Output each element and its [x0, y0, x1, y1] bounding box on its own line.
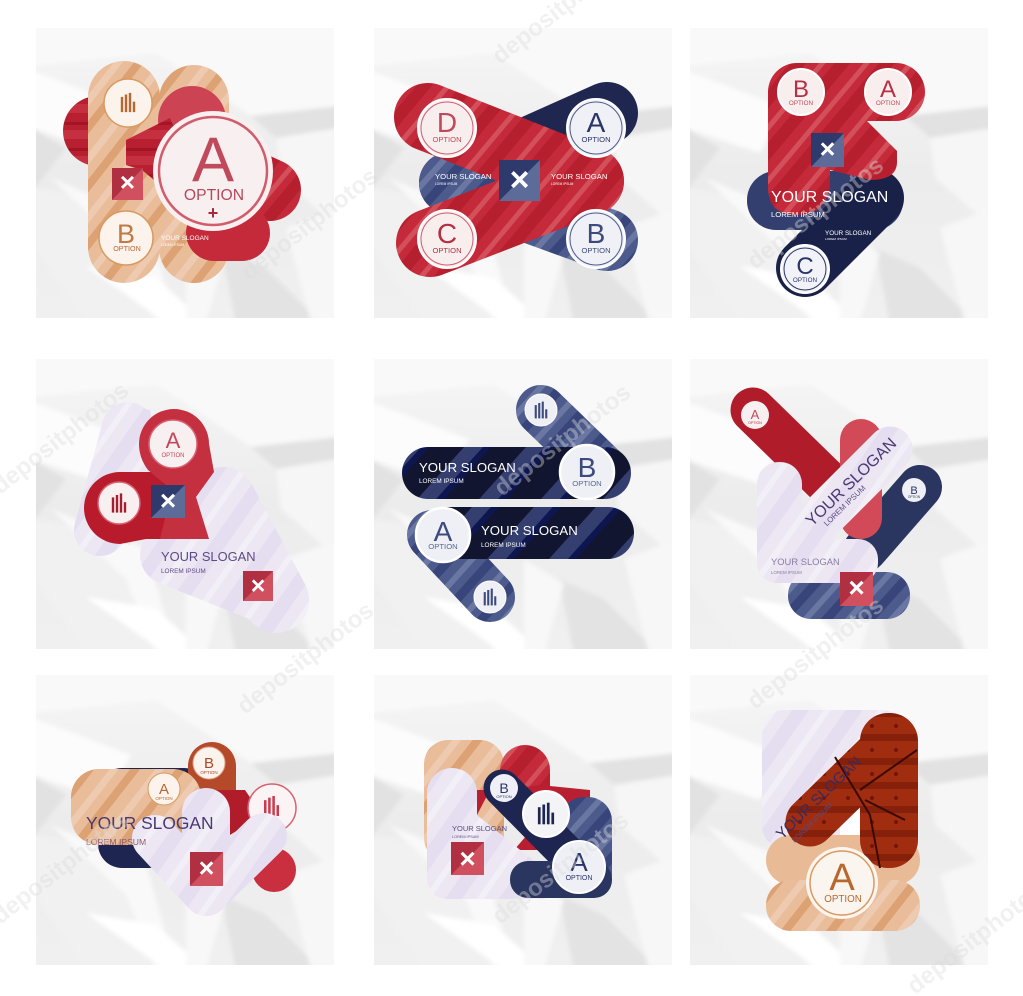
navy pill diagonal: [805, 198, 875, 268]
slogan small: YOUR SLOGAN: [771, 556, 840, 567]
circle: option C: OPTION: [793, 277, 818, 284]
circle: option B: [778, 69, 824, 115]
navy pill bottom: [788, 572, 910, 619]
slogan upper: YOUR SLOGAN: [419, 460, 516, 475]
brick pill vertical: [860, 713, 918, 868]
circle: option A: A: [166, 428, 181, 453]
circle: option A: [553, 841, 605, 893]
icon: close button red: [243, 571, 273, 601]
circle: option A: A: [192, 125, 234, 195]
slogan: [452, 824, 507, 839]
lavender pill right: [223, 500, 276, 600]
slogan text: YOUR SLOGAN: [161, 235, 209, 242]
circle: option B: [99, 211, 153, 265]
circle: option C: OPTION: [432, 246, 462, 255]
watermarks: depositphotos: [236, 163, 383, 286]
watermarks: depositphotos: [742, 152, 889, 275]
circle: option B: B: [793, 76, 809, 103]
circle: option A: OPTION: [161, 453, 185, 459]
slogan: LOREM IPSUM: [86, 837, 146, 847]
red pill vertical: [840, 440, 882, 518]
slogan small: LOREM IPSUM: [825, 237, 847, 241]
navy pill diagonal: [865, 487, 920, 550]
icon: bar chart badge top: [525, 394, 557, 426]
slogan small: [771, 556, 840, 575]
slogan lower: [481, 523, 578, 549]
circle: option C: [418, 210, 476, 268]
circle: option C: C: [796, 253, 814, 280]
slogan: [161, 549, 256, 575]
circle: option A: [741, 401, 769, 429]
slogan rotated: YOUR SLOGAN: [802, 434, 900, 530]
circle: option A: OPTION: [748, 421, 762, 425]
panel: mixed rounded cluster: [369, 670, 677, 970]
slogan left: [435, 172, 491, 186]
icon: close button: [112, 167, 143, 200]
tan pill: [424, 740, 504, 862]
lavender rounded panel: [762, 710, 904, 848]
circle: option B: [193, 747, 225, 779]
slogan upper: [419, 460, 516, 485]
slogan rotated: LOREM IPSUM: [790, 801, 834, 844]
slogan rotated: LOREM IPSUM: [822, 484, 868, 528]
icon: bar chart badge: [523, 791, 569, 837]
lavender pill diagonal: [817, 449, 890, 522]
icon: bar chart badge: [104, 79, 152, 127]
slogan right: YOUR SLOGAN: [551, 172, 607, 181]
circle: option A: [567, 99, 625, 157]
panel: diagonal check: [685, 354, 993, 654]
watermarks: depositphotos: [487, 807, 634, 930]
slogan large: [771, 189, 888, 219]
circle: option B: B: [578, 452, 596, 483]
circle: option B: OPTION: [113, 244, 141, 253]
red pill: [500, 745, 550, 820]
panel: red and navy slogan: [685, 23, 993, 323]
circle: option B: OPTION: [572, 479, 602, 488]
circle: option A: +: [208, 203, 218, 223]
watermarks: depositphotos: [742, 592, 889, 715]
red wedge: [210, 790, 262, 835]
circle: option B: B: [204, 755, 214, 772]
circle: option A: OPTION: [876, 100, 901, 107]
red pill vertical: [188, 742, 236, 837]
circle: option A: OPTION: [184, 187, 244, 204]
tan pill right: [159, 65, 229, 283]
circle: option A: A: [751, 407, 760, 422]
circle: option B: OPTION: [200, 770, 218, 775]
slogan left: YOUR SLOGAN: [435, 172, 491, 181]
circle: option A: [416, 508, 470, 562]
circle: option A: OPTION: [581, 135, 611, 144]
circle: option B: B: [910, 485, 918, 497]
red body: [768, 63, 925, 215]
navy pill: [98, 768, 208, 868]
dark fold lines: [835, 750, 917, 868]
icon: bar chart badge: [98, 482, 140, 524]
icon: close button: ×: [120, 167, 135, 197]
red circle lower right: [252, 848, 296, 892]
circle: option A: [153, 111, 273, 231]
lavender pill left: [100, 428, 128, 530]
panel: four option cross: [369, 23, 677, 323]
icon: close button: [451, 842, 484, 875]
tan pill: [71, 769, 201, 845]
circle: option D: D: [437, 107, 457, 138]
circle: option B: B: [117, 219, 135, 249]
panel: red and tan option A: [31, 23, 339, 323]
red pill left: [63, 96, 193, 166]
slogan: LOREM IPSUM: [452, 835, 479, 839]
red pin A: [139, 409, 214, 539]
slogan large: YOUR SLOGAN: [771, 189, 888, 206]
circle: option B: OPTION: [581, 246, 611, 255]
icon: close button navy: ×: [160, 485, 176, 516]
tan pill left: [88, 61, 160, 283]
slogan rotated: YOUR SLOGAN: [773, 753, 865, 843]
circle: option A: OPTION: [155, 796, 173, 801]
slogan: LOREM IPSUM: [161, 568, 206, 575]
slogan small: [825, 230, 872, 241]
blue pill lower diagonal: [432, 535, 490, 597]
red pill diagonal: [753, 410, 835, 490]
navy pill horizontal: [747, 171, 903, 230]
icon: close button: [499, 160, 540, 201]
circle: option A: [865, 69, 911, 115]
red diagonal: [505, 785, 590, 850]
navy pill horizontal: [510, 861, 612, 898]
tan pill lower: [766, 880, 920, 931]
panel: navy arrows: [369, 354, 677, 654]
navy pill diagonal: [502, 788, 574, 861]
circle: option B: OPTION: [908, 495, 921, 499]
white notch: [840, 810, 864, 840]
icon: bar chart badge: [248, 784, 296, 832]
red pill right: [215, 165, 270, 190]
slogan: YOUR SLOGAN: [86, 813, 214, 833]
slogan text: [161, 235, 209, 247]
watermarks: depositphotos: [232, 597, 379, 720]
navy pill upper right: [450, 113, 607, 183]
dark pill upper: [428, 447, 605, 499]
circle: option A: OPTION: [824, 894, 862, 905]
red pill upper: [158, 86, 226, 154]
slogan text: LOREM IPSUM: [161, 243, 184, 247]
icon: close button: ×: [199, 853, 214, 883]
circle: option B: [567, 210, 625, 268]
circle: option C: [781, 245, 829, 293]
circle: option A: A: [880, 76, 896, 103]
blue pill lower right: [450, 183, 607, 240]
red pill upper left to right: [428, 117, 590, 181]
lavender pill vertical: [757, 462, 802, 583]
icon: close button red: ×: [251, 572, 265, 600]
circle: option B: [560, 445, 614, 499]
circle: option A: [149, 420, 197, 468]
panel: lavender and red pin: [31, 354, 339, 654]
circle: option C: C: [437, 218, 457, 249]
slogan upper: LOREM IPSUM: [419, 478, 464, 485]
tan pill upper: [766, 835, 920, 885]
lavender arrow: [155, 812, 264, 893]
red wedge middle: [126, 118, 190, 195]
lavender pill slogan: [170, 555, 270, 595]
circle: option A: OPTION: [428, 542, 458, 551]
circle: option B: OPTION: [496, 794, 512, 799]
red notch: [477, 790, 490, 815]
circle: option B: OPTION: [789, 100, 814, 107]
icon: bar chart badge bottom: [474, 581, 506, 613]
brick pill diagonal: [810, 744, 890, 822]
lavender shape: [427, 768, 545, 899]
icon: close button: [190, 852, 223, 886]
slogan right: [551, 172, 607, 186]
blue pill upper diagonal: [541, 410, 605, 472]
circle: option A: A: [434, 516, 453, 547]
circle: option B: [902, 478, 926, 502]
slogan: YOUR SLOGAN: [161, 549, 256, 564]
circle: option A: [806, 847, 878, 919]
icon: close button: [811, 133, 844, 167]
watermarks: depositphotos: [489, 379, 636, 502]
icon: close button: ×: [459, 843, 476, 874]
slogan small: LOREM IPSUM: [771, 570, 802, 575]
slogan lower: YOUR SLOGAN: [481, 523, 578, 538]
lavender pill horizontal: [757, 539, 878, 583]
circle: option A: A: [159, 781, 169, 798]
slogan left: LOREM IPSUM: [435, 182, 458, 186]
slogan: YOUR SLOGAN: [452, 824, 507, 833]
lavender fill slogan: [165, 480, 275, 620]
icon: close button: ×: [848, 572, 865, 603]
slogan: [86, 813, 214, 847]
circle: option B: B: [499, 780, 509, 796]
circle: option D: [418, 99, 476, 157]
slogan right: LOREM IPSUM: [551, 182, 574, 186]
circle: option B: B: [587, 218, 605, 249]
circle: option A: A: [829, 857, 855, 899]
lavender filler left: [85, 404, 160, 545]
icon: close button: ×: [820, 134, 835, 164]
circle: option B: [490, 774, 518, 802]
red pill lower: [186, 205, 270, 261]
red pill lower left: [430, 181, 590, 243]
dark pill lower: [445, 507, 608, 559]
blue dotted pill: [560, 797, 612, 898]
red pill with bars: [84, 472, 209, 544]
slogan small: YOUR SLOGAN: [825, 230, 872, 237]
circle: option A: OPTION: [566, 875, 592, 882]
slogan lower: LOREM IPSUM: [481, 542, 526, 549]
circle: option A: [148, 773, 180, 805]
circle: option D: OPTION: [432, 135, 462, 144]
panel: tan and lavender arrow: [31, 670, 339, 970]
icon: close button: [840, 572, 873, 606]
panel: brick and tan A: [685, 670, 993, 970]
circle: option A: A: [570, 847, 588, 877]
slogan large: LOREM IPSUM: [771, 210, 825, 219]
icon: close button: ×: [510, 161, 529, 199]
icon: close button navy: [151, 485, 185, 518]
circle: option A: A: [587, 107, 606, 138]
